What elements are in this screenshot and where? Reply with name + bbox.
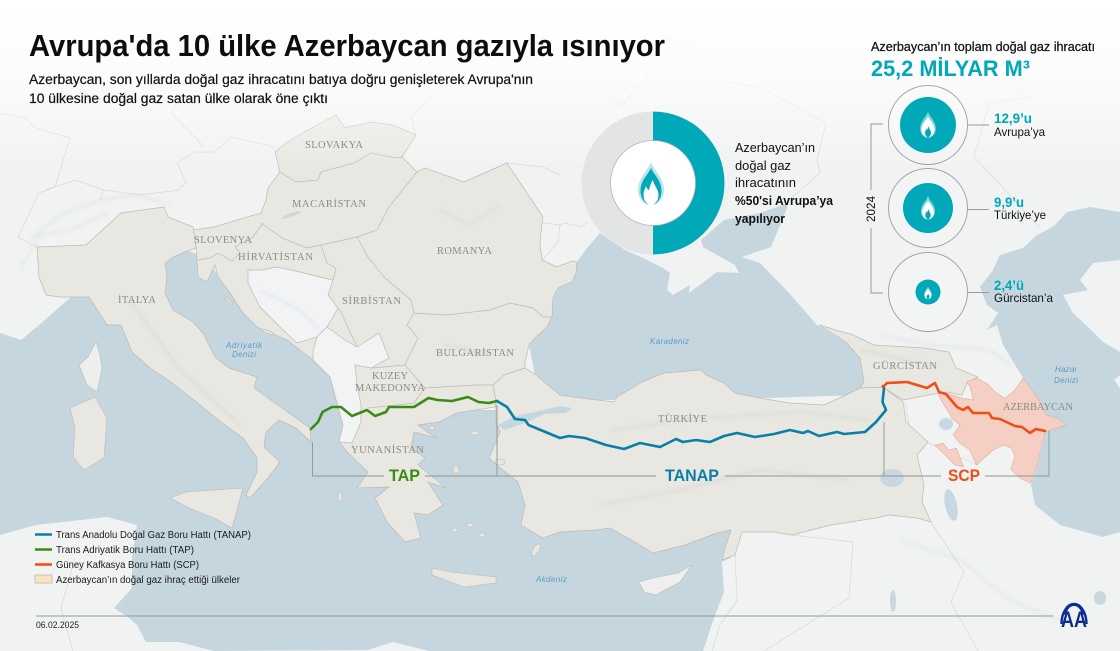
donut caption: ihracatının [735,175,796,190]
sea labels: Akdeniz [535,575,567,584]
sea labels: Karadeniz [650,337,689,346]
sea labels: Hazar [1055,365,1077,374]
bracket with year 2024: 2024 [866,195,878,222]
legend: Trans Adriyatik Boru Hattı (TAP) [56,545,194,556]
land: Montenegro Kosovo Albania [313,327,389,443]
top fade [0,0,1120,170]
country labels: ROMANYA [437,246,492,257]
country labels: KUZEY [372,371,408,382]
lakes [281,210,1106,612]
bubble: Turkey 9.9 [888,168,1046,248]
bubble: Europe 12.9: Avrupa’ya [994,125,1045,139]
bracket with year 2024 [866,124,883,293]
sea: Black Sea [529,203,864,400]
beige country: Georgia [819,325,978,400]
sea labels: Adriyatik [225,341,263,350]
country labels: TÜRKİYE [658,413,707,425]
bubble: Georgia 2.4: Gürcistan’a [994,291,1053,305]
inland borders [197,153,552,408]
terrain shading [20,195,1060,620]
total export heading: Azerbaycan’ın toplam doğal gaz ihracatı [871,40,1095,54]
bubble: Georgia 2.4: 2,4’ü [994,278,1024,293]
country labels: MAKEDONYA [355,383,425,394]
sea: Mediterranean [0,250,730,651]
sea: Marmara [498,406,572,430]
country labels: SİRBİSTAN [342,295,401,307]
date: 06.02.2025 [36,620,79,631]
country labels: SLOVENYA [194,235,252,246]
total export heading: 25,2 MİLYAR M³ [871,56,1030,81]
country labels [118,140,1073,456]
country labels: AZERBAYCAN [1003,402,1073,413]
donut caption: %50'si Avrupa’ya [735,193,834,208]
country labels: GÜRCİSTAN [873,360,937,372]
footer rule [36,615,1053,617]
bubble: Europe 12.9 [888,86,1045,164]
donut caption: doğal gaz [735,158,791,173]
bubble: Turkey 9.9: 9,9’u [994,195,1024,210]
highlighted country: Azerbaijan [935,378,1066,483]
country labels: BULGARİSTAN [436,347,514,359]
subtitle: Azerbaycan, son yıllarda doğal gaz ihracatını batıya doğru genişleterek Avrupa'nın [29,72,533,87]
bubble: Georgia 2.4 [888,252,1053,332]
beige country: Turkey [489,368,931,560]
country labels: SLOVAKYA [305,140,363,151]
land: Bosnia [248,267,338,343]
beige country: Italy [37,207,311,498]
pipeline label: TAP: TAP [389,466,420,485]
islands [70,297,692,595]
pipeline: TAP [311,397,497,429]
beige country: Central Europe and Balkans [193,115,577,542]
legend: Azerbaycan’ın doğal gaz ihraç ettiği ülkeler [56,575,241,586]
pipeline: TANAP [497,386,886,449]
icon: flame in donut [638,162,664,205]
pipeline label: TANAP: TANAP [665,466,719,485]
bubble: Turkey 9.9: Türkiye’ye [994,208,1046,222]
subtitle: 10 ülkesine doğal gaz satan ülke olarak öne çıktı [29,91,328,106]
sea: Caspian [980,207,1120,537]
legend: Trans Anadolu Doğal Gaz Boru Hattı (TANAP) [56,530,251,541]
sea labels [225,337,1078,584]
land: east Caspian shore [1114,375,1120,388]
legend: Güney Kafkasya Boru Hattı (SCP) [56,560,199,571]
title: Avrupa'da 10 ülke Azerbaycan gazıyla ısınıyor [29,28,665,63]
total export heading [871,40,1095,81]
country labels: İTALYA [118,294,156,306]
country labels: YUNANİSTAN [351,444,424,456]
subtitle [29,72,533,106]
pipeline section brackets [312,405,1049,476]
donut caption: Azerbaycan’ın [735,140,815,155]
country labels: HİRVATİSTAN [238,251,313,263]
icon: AA logo: AA [1061,607,1087,632]
donut caption [735,140,834,226]
bubble: Europe 12.9: 12,9’u [994,111,1032,126]
pipeline: SCP [883,382,1045,433]
donut caption: yapılıyor [735,211,785,226]
donut chart: 50 percent to Europe [582,112,724,254]
sea labels: Denizi [232,350,256,359]
country labels: MACARİSTAN [292,198,366,210]
sea labels: Denizi [1054,376,1078,385]
pipeline label: SCP: SCP [948,466,980,485]
legend [35,530,251,586]
